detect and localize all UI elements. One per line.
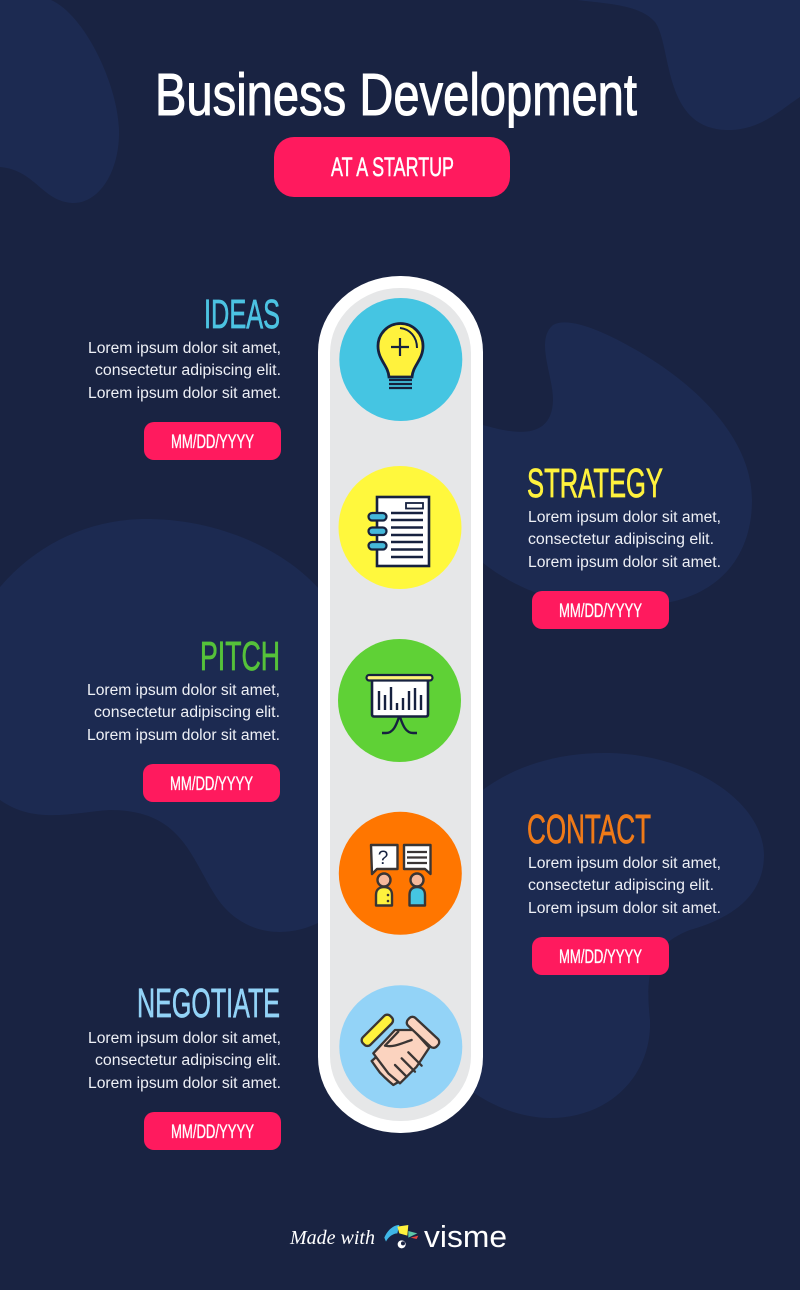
icon: visme logo — [384, 1225, 418, 1248]
text block: strategy — [528, 509, 721, 571]
date badge: ideas — [144, 422, 281, 460]
date badge: strategy — [532, 591, 669, 629]
date badge: strategy: MM/DD/YYYY — [559, 601, 642, 622]
icon: two people talking: ? — [378, 848, 388, 869]
text block: contact: Lorem ipsum dolor sit amet, — [528, 855, 721, 872]
date badge: ideas: MM/DD/YYYY — [171, 432, 254, 453]
text block: ideas — [88, 340, 281, 402]
heading: ideas: IDEAS — [204, 291, 280, 337]
date badge: pitch: MM/DD/YYYY — [170, 774, 253, 795]
step: pitch — [87, 633, 280, 802]
date badge: negotiate: MM/DD/YYYY — [171, 1122, 254, 1143]
text block: pitch: Lorem ipsum dolor sit amet, — [87, 682, 280, 699]
footer: made with visme: Made with — [289, 1227, 375, 1249]
text block: strategy: Lorem ipsum dolor sit amet, — [528, 509, 721, 526]
text block: ideas: Lorem ipsum dolor sit amet, — [88, 340, 281, 357]
title: Business Development — [155, 62, 637, 128]
text block: strategy: Lorem ipsum dolor sit amet. — [528, 554, 721, 571]
heading: negotiate: NEGOTIATE — [137, 980, 280, 1026]
text block: negotiate — [88, 1030, 281, 1092]
text block: contact: consectetur adipiscing elit. — [528, 877, 714, 894]
text block: negotiate: Lorem ipsum dolor sit amet, — [88, 1030, 281, 1047]
heading: contact: CONTACT — [527, 806, 651, 852]
step: contact — [527, 806, 721, 975]
text block: negotiate: Lorem ipsum dolor sit amet. — [88, 1075, 281, 1092]
subtitle badge: AT A STARTUP — [331, 152, 454, 182]
step: negotiate — [88, 980, 281, 1150]
date badge: pitch — [143, 764, 280, 802]
step: ideas — [88, 291, 281, 460]
text block: strategy: consectetur adipiscing elit. — [528, 531, 714, 548]
heading: strategy: STRATEGY — [527, 460, 663, 506]
text block: ideas: Lorem ipsum dolor sit amet. — [88, 385, 281, 402]
text block: negotiate: consectetur adipiscing elit. — [95, 1052, 281, 1069]
text block: contact: Lorem ipsum dolor sit amet. — [528, 900, 721, 917]
footer: made with visme — [289, 1219, 507, 1254]
text block: pitch: consectetur adipiscing elit. — [94, 704, 280, 721]
subtitle badge — [274, 137, 510, 197]
text block: pitch: Lorem ipsum dolor sit amet. — [87, 727, 280, 744]
text block: pitch — [87, 682, 280, 744]
text block: ideas: consectetur adipiscing elit. — [95, 362, 281, 379]
icon: notebook — [338, 466, 462, 589]
timeline pill — [318, 276, 483, 1133]
icon: presentation board — [338, 639, 461, 762]
text block: contact — [528, 855, 721, 917]
icon: light bulb — [339, 298, 462, 421]
footer: made with visme: visme — [424, 1219, 507, 1254]
heading: pitch: PITCH — [200, 633, 280, 679]
step: strategy — [527, 460, 721, 629]
date badge: negotiate — [144, 1112, 281, 1150]
icon: handshake — [339, 985, 462, 1108]
icon: two people talking — [339, 812, 462, 935]
date badge: contact: MM/DD/YYYY — [559, 947, 642, 968]
date badge: contact — [532, 937, 669, 975]
